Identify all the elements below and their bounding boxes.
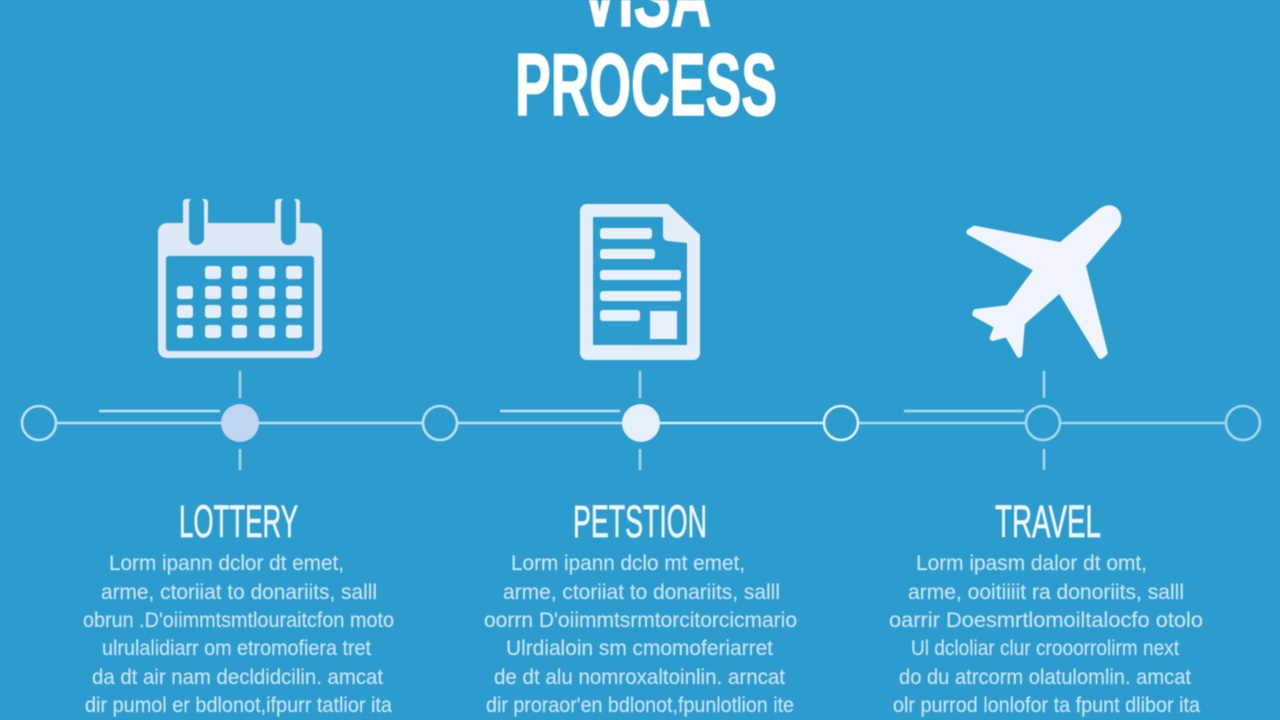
timeline (22, 371, 1260, 470)
text block: petition: Ulrdialoin sm cmomoferiarret (506, 637, 773, 660)
heading: petition: PETSTION (573, 496, 707, 547)
panel: travel (889, 496, 1203, 717)
text block: petition: de dt alu nomroxaltoinlin. arncat (494, 666, 785, 689)
text block: lottery: da dt air nam decldidcilin. amcat (92, 666, 383, 689)
text block: lottery: obrun .D'oiimmtsmtlouraitcfon moto (83, 609, 394, 632)
icon: document (580, 204, 700, 360)
heading: travel: TRAVEL (995, 496, 1101, 547)
text block: lottery: ulrulalidiarr om etromofiera tret (102, 637, 371, 660)
text block: lottery: arme, ctoriiat to donariits, salll (101, 581, 377, 604)
text block: travel (889, 552, 1203, 717)
text block: lottery (83, 552, 394, 717)
text block: petition: oorrn D'oiimmtsrmtorcitorcicmario (484, 609, 797, 632)
text block: petition: Lorm ipann dclo mt emet, (511, 552, 745, 575)
text block: travel: olr purrod lonlofor ta fpunt dlibor ita (893, 694, 1200, 717)
panel: lottery (83, 496, 394, 717)
title (515, 0, 777, 134)
title: PROCESS (515, 35, 777, 134)
text block: lottery: dir pumol er bdlonot,ifpurr tatlior ita (85, 694, 392, 717)
text block: petition: arme, ctoriiat to donariits, salll (503, 581, 780, 604)
text block: petition: dir proraor'en bdlonot,fpunlotlion ite (486, 694, 794, 717)
text block: travel: Ul dcloliar clur crooorrolirm next (911, 637, 1179, 660)
text block: travel: oarrir Doesmrtlomoiltalocfo otolo (889, 609, 1203, 632)
text block: petition (484, 552, 797, 717)
text block: travel: arme, ooitiiiit ra donoriits, salll (908, 581, 1184, 604)
text block: lottery: Lorm ipann dclor dt emet, (109, 552, 344, 575)
text block: travel: Lorm ipasm dalor dt omt, (916, 552, 1147, 575)
heading: lottery: LOTTERY (179, 496, 298, 547)
icon: airplane (969, 208, 1118, 356)
panel: petition (484, 496, 797, 717)
text block: travel: do du atrcorm olatulomlin. amcat (899, 666, 1191, 689)
icon: calendar (158, 197, 322, 358)
